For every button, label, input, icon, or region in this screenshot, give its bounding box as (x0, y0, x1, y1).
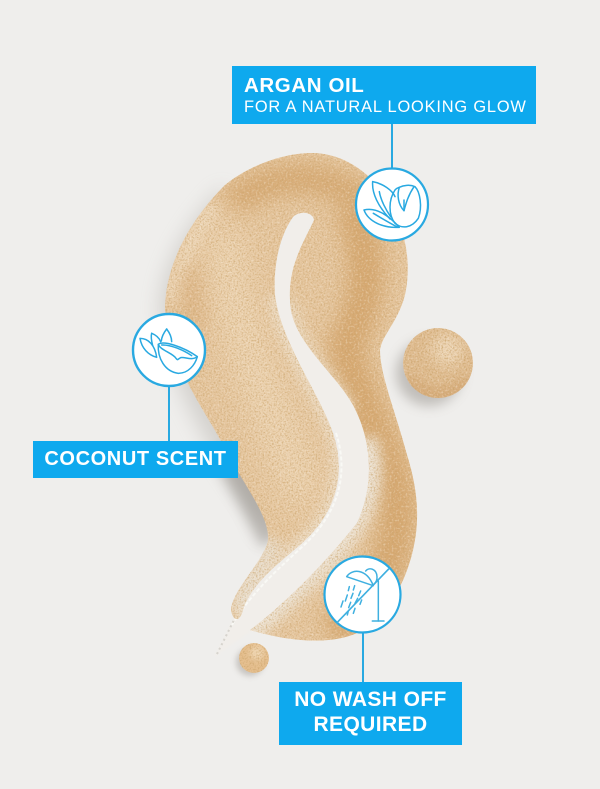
darker tone: top arc (232, 179, 365, 205)
product swatch illustration (154, 153, 473, 678)
callout: no wash off required: NO WASH OFF (294, 688, 447, 711)
large cream dollop (403, 328, 473, 398)
callout: argan oil (232, 66, 536, 124)
callout: coconut scent (33, 441, 238, 478)
translucent white band (214, 210, 369, 657)
darker tone: right lobe (330, 205, 398, 632)
connector line: no wash off (362, 630, 364, 682)
callout: no wash off required: REQUIRED (313, 713, 428, 736)
callout: coconut scent: COCONUT SCENT (44, 448, 227, 470)
callout: no wash off required (279, 682, 462, 745)
connector line: argan oil (390, 124, 392, 170)
cast shadows (160, 185, 462, 676)
small cream dollop (239, 643, 269, 673)
callout subheading: natural glow: FOR A NATURAL LOOKING GLOW (244, 98, 527, 116)
pale tone along inner band (245, 440, 366, 630)
lighter tone: left lobe (225, 230, 305, 500)
callout heading: argan oil: ARGAN OIL (244, 74, 364, 97)
connector line: coconut scent (168, 385, 170, 441)
main cream swirl (165, 153, 418, 641)
